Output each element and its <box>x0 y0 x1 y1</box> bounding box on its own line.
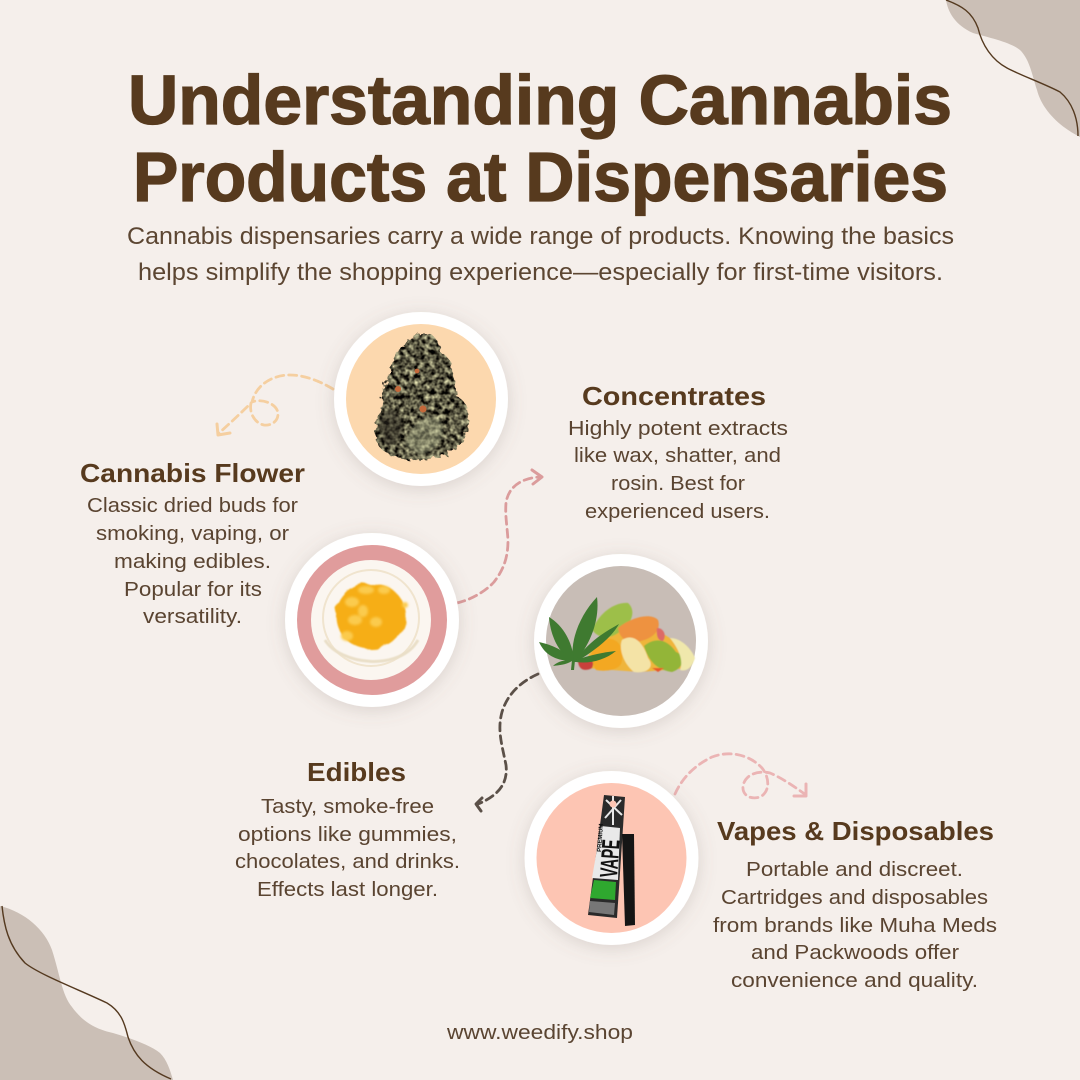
icon: vape box and pen <box>588 795 635 926</box>
text block: Concentrates: Concentrates <box>582 381 766 411</box>
footer: website: www.weedify.shop <box>446 1021 633 1044</box>
panel: concentrate image <box>285 533 459 707</box>
text block: Vapes and Disposables: Vapes & Disposables <box>717 816 994 846</box>
icon: glass dish with amber concentrate <box>311 560 431 680</box>
arrow: edibles circle to Edibles text <box>476 674 538 811</box>
panel: cannabis flower image <box>334 312 508 486</box>
text block: Vapes and Disposables: and Packwoods offer <box>751 941 959 964</box>
text block: Edibles: Tasty, smoke-free <box>261 795 434 818</box>
subtitle: helps simplify the shopping experience—especially for first-time visitors. <box>138 259 943 286</box>
text block: Concentrates: rosin. Best for <box>611 472 745 495</box>
icon: cannabis bud <box>375 333 468 460</box>
text block: Cannabis Flower: Classic dried buds for <box>87 494 298 517</box>
text block: Concentrates <box>568 381 788 523</box>
text block: Edibles: Effects last longer. <box>257 878 438 901</box>
text block: Vapes and Disposables: Portable and discreet. <box>746 858 963 881</box>
text block: Vapes and Disposables: Cartridges and disposables <box>721 886 988 909</box>
arrow: flower circle to Cannabis Flower text <box>217 375 333 435</box>
icon: gummy bears and leaf <box>539 597 695 672</box>
text block: Edibles: chocolates, and drinks. <box>235 850 460 873</box>
text block: Concentrates: like wax, shatter, and <box>574 444 781 467</box>
text block: Cannabis Flower <box>80 458 305 628</box>
title <box>128 61 952 216</box>
text block: Cannabis Flower: making edibles. <box>114 550 271 573</box>
text block: Cannabis Flower: smoking, vaping, or <box>96 522 289 545</box>
text block: Edibles: Edibles <box>307 757 406 787</box>
panel: vape image <box>524 771 698 945</box>
text block: Edibles: options like gummies, <box>238 823 457 846</box>
panel: edibles image <box>534 554 708 728</box>
text block: Cannabis Flower: Cannabis Flower <box>80 458 305 488</box>
decorative corner: bottom left <box>0 906 173 1080</box>
subtitle <box>127 223 954 286</box>
icon: vape box and pen: PREMIUM <box>597 823 605 852</box>
decorative corner: top right <box>946 0 1080 137</box>
title: Products at Dispensaries <box>133 138 948 216</box>
arrow: concentrate circle to Concentrates text <box>457 470 542 603</box>
text block: Edibles <box>235 757 460 901</box>
icon: vape box and pen: VAPE <box>595 839 626 878</box>
text block: Concentrates: Highly potent extracts <box>568 417 788 440</box>
subtitle: Cannabis dispensaries carry a wide range of products. Knowing the basics <box>127 223 954 250</box>
text block: Vapes and Disposables <box>713 816 997 992</box>
text block: Cannabis Flower: Popular for its <box>124 578 262 601</box>
text block: Concentrates: experienced users. <box>585 500 770 523</box>
text block: Vapes and Disposables: convenience and quality. <box>731 969 978 992</box>
title: Understanding Cannabis <box>128 61 952 139</box>
text block: Vapes and Disposables: from brands like Muha Meds <box>713 914 997 937</box>
arrow: vape circle to Vapes text <box>675 754 806 798</box>
text block: Cannabis Flower: versatility. <box>143 605 242 628</box>
